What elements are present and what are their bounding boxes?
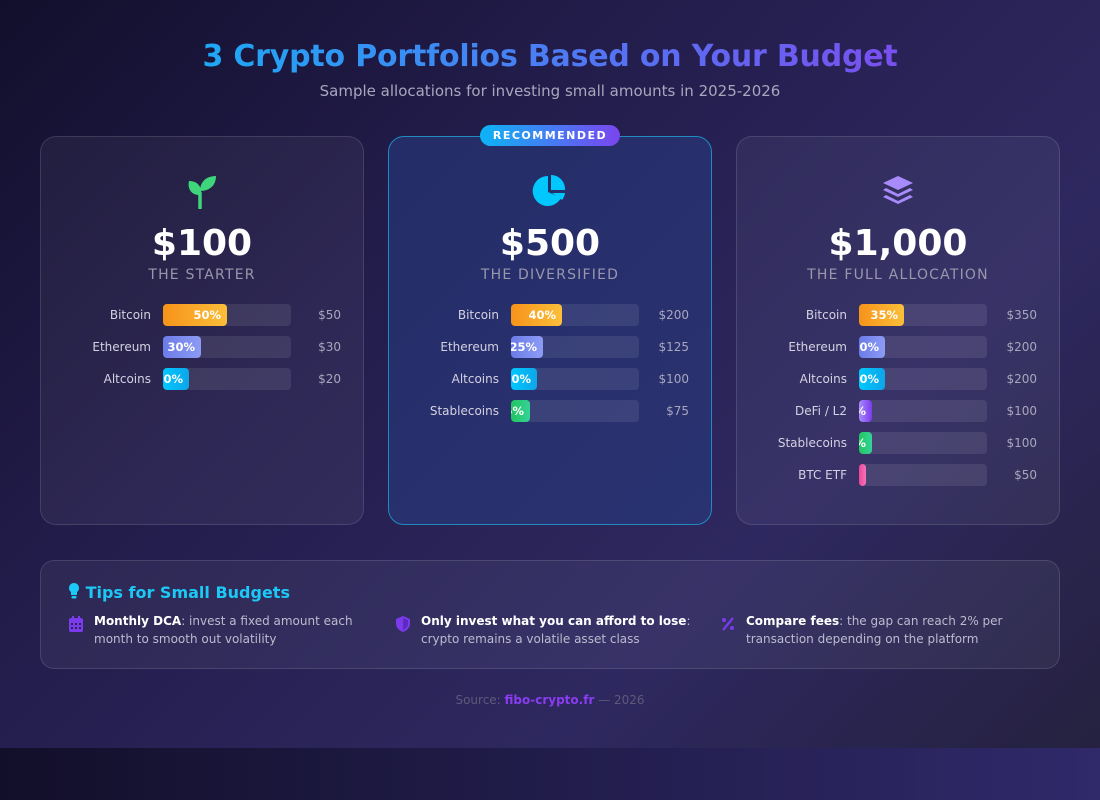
- bar: Altcoins: Altcoins: [452, 372, 499, 386]
- bar: Ethereum: 30%: [167, 340, 195, 354]
- bar: Bitcoin: Bitcoin: [806, 308, 847, 322]
- bar: DeFi / L2: $100: [1006, 404, 1037, 418]
- bar: Stablecoins: [778, 432, 1037, 454]
- bar: Ethereum: [440, 336, 689, 358]
- bar: Stablecoins: $75: [666, 404, 689, 418]
- bar: Bitcoin: [458, 304, 689, 326]
- icon: sprout: [188, 176, 216, 209]
- bar: Ethereum: $125: [658, 340, 689, 354]
- bar: Bitcoin: Bitcoin: [110, 308, 151, 322]
- subtitle: Sample allocations for investing small amounts in 2025-2026: [320, 82, 780, 100]
- icon: layers: [883, 176, 913, 204]
- bar: Ethereum: Ethereum: [92, 340, 151, 354]
- bar: Ethereum: $200: [1006, 340, 1037, 354]
- bar: Ethereum: Ethereum: [788, 340, 847, 354]
- bar: Bitcoin: $50: [318, 308, 341, 322]
- bar: Bitcoin: 50%: [193, 308, 221, 322]
- bar: Bitcoin: $350: [1006, 308, 1037, 322]
- tip: compare fees: Compare fees: the gap can reach 2% per transaction depending on the platform: [746, 614, 1002, 646]
- bar: Ethereum: [92, 336, 341, 358]
- tier name: THE FULL ALLOCATION: [807, 267, 989, 283]
- icon: pie chart: [532, 175, 565, 206]
- bar: Altcoins: $20: [318, 372, 341, 386]
- bar: Altcoins: $100: [658, 372, 689, 386]
- bar: Ethereum: $30: [318, 340, 341, 354]
- tier name: THE STARTER: [148, 267, 256, 283]
- bar: Altcoins: Altcoins: [104, 372, 151, 386]
- bar: BTC ETF: [798, 464, 1037, 486]
- bar: BTC ETF: $50: [1014, 468, 1037, 482]
- bar: Stablecoins: Stablecoins: [778, 436, 847, 450]
- badge: recommended: RECOMMENDED: [493, 129, 607, 142]
- bar: Bitcoin: 40%: [528, 308, 556, 322]
- panel: $500 diversified: [388, 136, 712, 525]
- bar: Bitcoin: 35%: [870, 308, 898, 322]
- price: $500: [500, 223, 600, 264]
- bar: Bitcoin: [806, 304, 1037, 326]
- title: 3 Crypto Portfolios Based on Your Budget: [202, 39, 898, 74]
- bar: Bitcoin: [110, 304, 341, 326]
- bar: Stablecoins: $100: [1006, 436, 1037, 450]
- badge: recommended: [480, 125, 620, 146]
- bar: Bitcoin: $200: [658, 308, 689, 322]
- bar: Bitcoin: Bitcoin: [458, 308, 499, 322]
- tier name: THE DIVERSIFIED: [481, 267, 619, 283]
- source footer: Source: fibo-crypto.fr — 2026: [455, 693, 645, 707]
- bar: Ethereum: [788, 336, 1037, 358]
- bar: Stablecoins: Stablecoins: [430, 404, 499, 418]
- bar: Altcoins: $200: [1006, 372, 1037, 386]
- tip: only invest what you can afford: Only invest what you can afford to lose: crypto remains a volatile asset class: [421, 614, 690, 646]
- tips heading: Tips for Small Budgets: [86, 583, 290, 602]
- panel: tips: [40, 560, 1060, 669]
- panel: $100 starter: [40, 136, 364, 525]
- bar: Altcoins: Altcoins: [800, 372, 847, 386]
- bar: Ethereum: Ethereum: [440, 340, 499, 354]
- price: $1,000: [829, 223, 967, 264]
- price: $100: [152, 223, 252, 264]
- bar: Altcoins: [452, 368, 689, 390]
- tip: monthly DCA: Monthly DCA: invest a fixed amount each month to smooth out volatility: [94, 614, 353, 646]
- bar: Altcoins: [104, 368, 341, 390]
- panel: $1,000 full allocation: [736, 136, 1060, 525]
- bar: DeFi / L2: DeFi / L2: [795, 404, 847, 418]
- bar: BTC ETF: BTC ETF: [798, 468, 847, 482]
- bar: DeFi / L2: [795, 400, 1037, 422]
- bar: Altcoins: [800, 368, 1037, 390]
- bar: Stablecoins: [430, 400, 689, 422]
